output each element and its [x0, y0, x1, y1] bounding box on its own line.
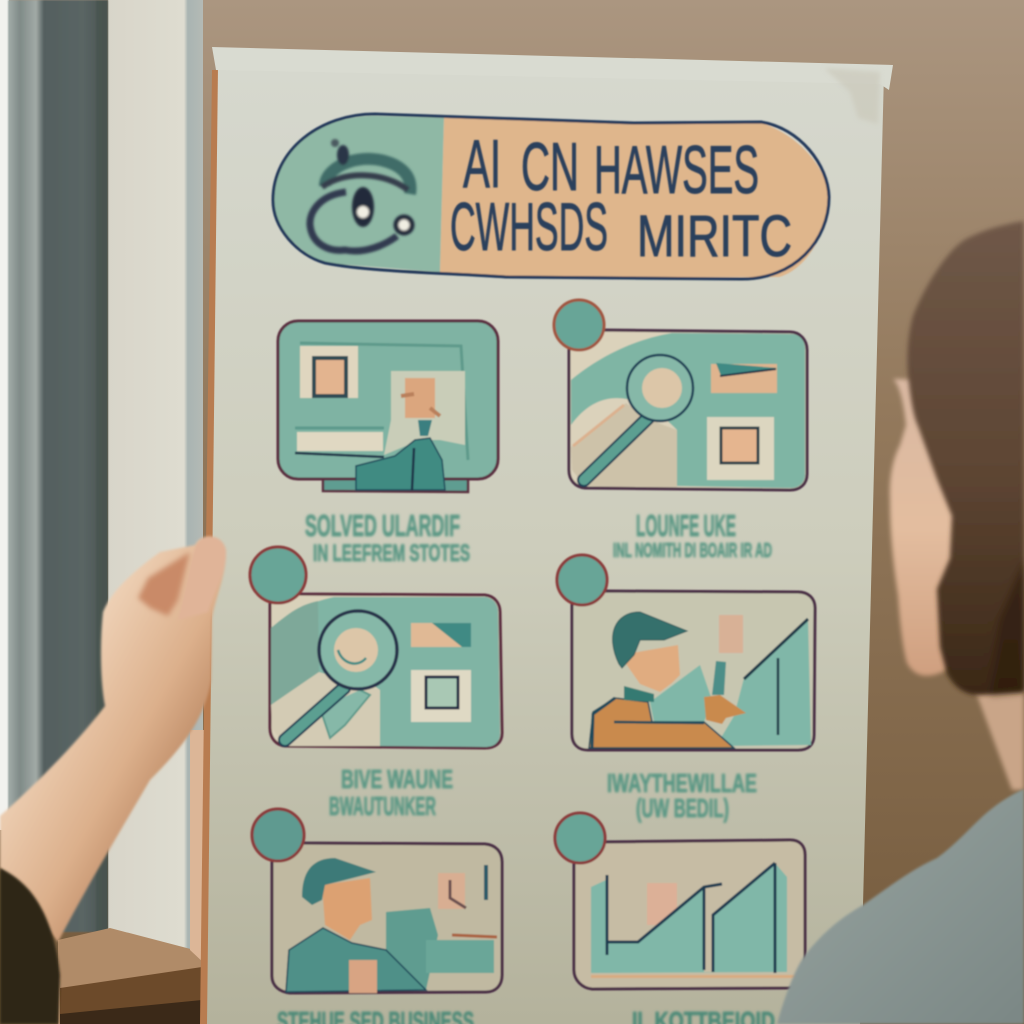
panel 5 number badge [252, 809, 304, 861]
header title: AI [463, 126, 501, 202]
caption 3 [329, 764, 453, 821]
window sill [58, 928, 202, 1024]
panel 6: line chart [555, 813, 805, 989]
caption 1: SOLVED ULARDIF [305, 508, 460, 543]
curtain [8, 0, 108, 932]
header title: CN [521, 129, 579, 205]
header title [450, 126, 792, 269]
person in foreground: shirt [777, 789, 1024, 1024]
poster header banner [273, 114, 829, 279]
panel 3 number badge [250, 547, 306, 603]
person in foreground: face [890, 379, 990, 676]
panel 1: screen with framed squares [278, 321, 498, 492]
caption 1 [305, 508, 470, 567]
left sleeve [0, 868, 60, 1024]
panel 5: person with cap [252, 809, 502, 993]
header title: HAWSES [594, 132, 759, 208]
panel 2 number badge [554, 300, 604, 350]
poster wooden left edge [200, 70, 219, 1024]
caption 2 [613, 508, 772, 562]
caption 1: IN LEEFREM STOTES [313, 540, 470, 567]
header title: MIRITC [637, 204, 792, 269]
caption 2: LOUNFE UKE [636, 508, 736, 543]
thumb [178, 537, 226, 620]
person in foreground: hair [907, 221, 1024, 695]
poster corner wear [824, 68, 880, 124]
left arm and hand holding poster [0, 536, 226, 942]
caption 4: (UW BEDIL) [636, 793, 729, 823]
caption 3: BWAUTUNKER [329, 791, 436, 821]
caption 3: BIVE WAUNE [341, 764, 453, 794]
window edge light strip [0, 0, 9, 830]
window frame [108, 0, 203, 952]
panel 4: person with chart [557, 555, 815, 750]
panel 3: magnifier scene [250, 547, 502, 748]
curled fingers [138, 552, 190, 616]
poster top strip [212, 47, 893, 90]
panel 2: magnifier scene [554, 300, 807, 490]
caption 4: IWAYTHEWILLAE [607, 768, 757, 798]
person in foreground: neck [975, 690, 1024, 790]
panel 4 number badge [557, 555, 607, 605]
monitor stand [323, 474, 468, 492]
caption 2: INL NOMITH DI BOAIR IR AD [613, 540, 772, 562]
poster paper [207, 66, 884, 1024]
caption 4 [607, 768, 757, 823]
header icon: mascot head [310, 139, 412, 251]
poster peach side edge [190, 730, 210, 965]
panel 6 number badge [555, 813, 605, 863]
header title: CWHSDS [450, 189, 608, 265]
